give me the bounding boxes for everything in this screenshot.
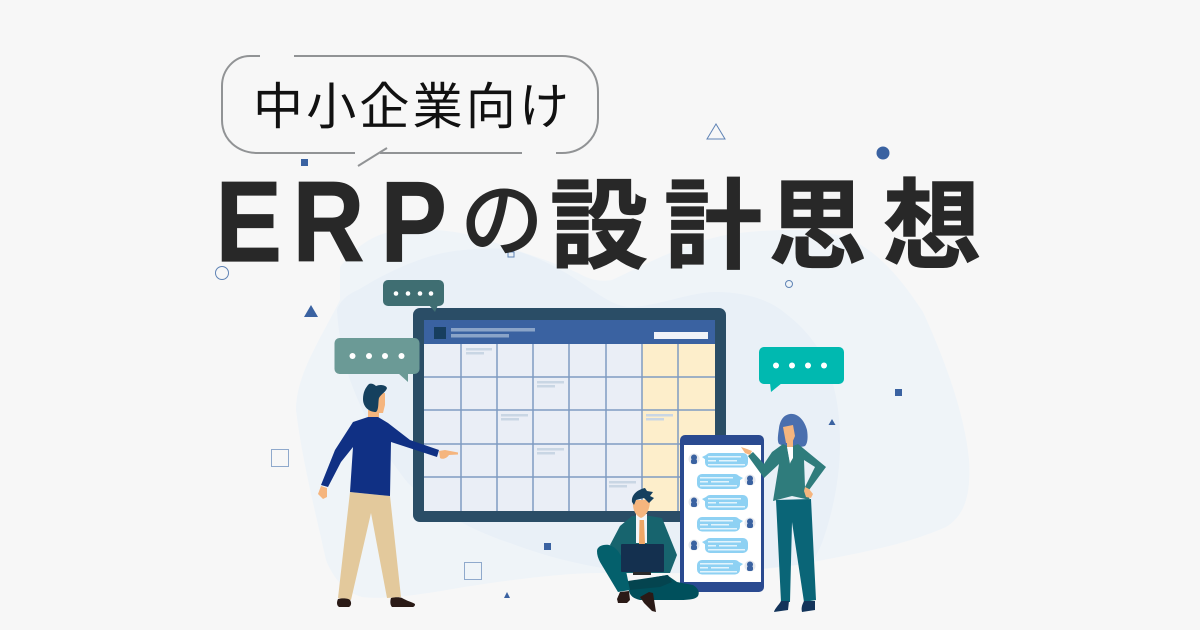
calendar entries [466,348,673,488]
main title: R [293,158,364,286]
decorative shapes [216,124,902,598]
calendar grid [424,344,715,511]
phone [680,435,764,592]
standing man [318,384,458,607]
calendar [413,308,726,522]
calendar header [424,320,715,344]
main title: 想 [883,171,981,281]
seated man [597,488,699,612]
chat bubble: sage [334,338,420,382]
chat bubble: turquoise [759,347,844,392]
main title: E [216,158,282,286]
main title: の [460,174,544,268]
woman [741,414,826,612]
main title: 思 [768,171,867,281]
speech bubble outline [222,56,598,166]
main title: 計 [664,171,762,281]
phone chat rows [688,453,756,574]
chat bubble: dark teal [383,280,444,312]
main title [216,158,981,286]
main title: 設 [550,171,648,281]
main title: P [381,158,447,286]
subtitle: 中小企業向け [253,79,569,135]
